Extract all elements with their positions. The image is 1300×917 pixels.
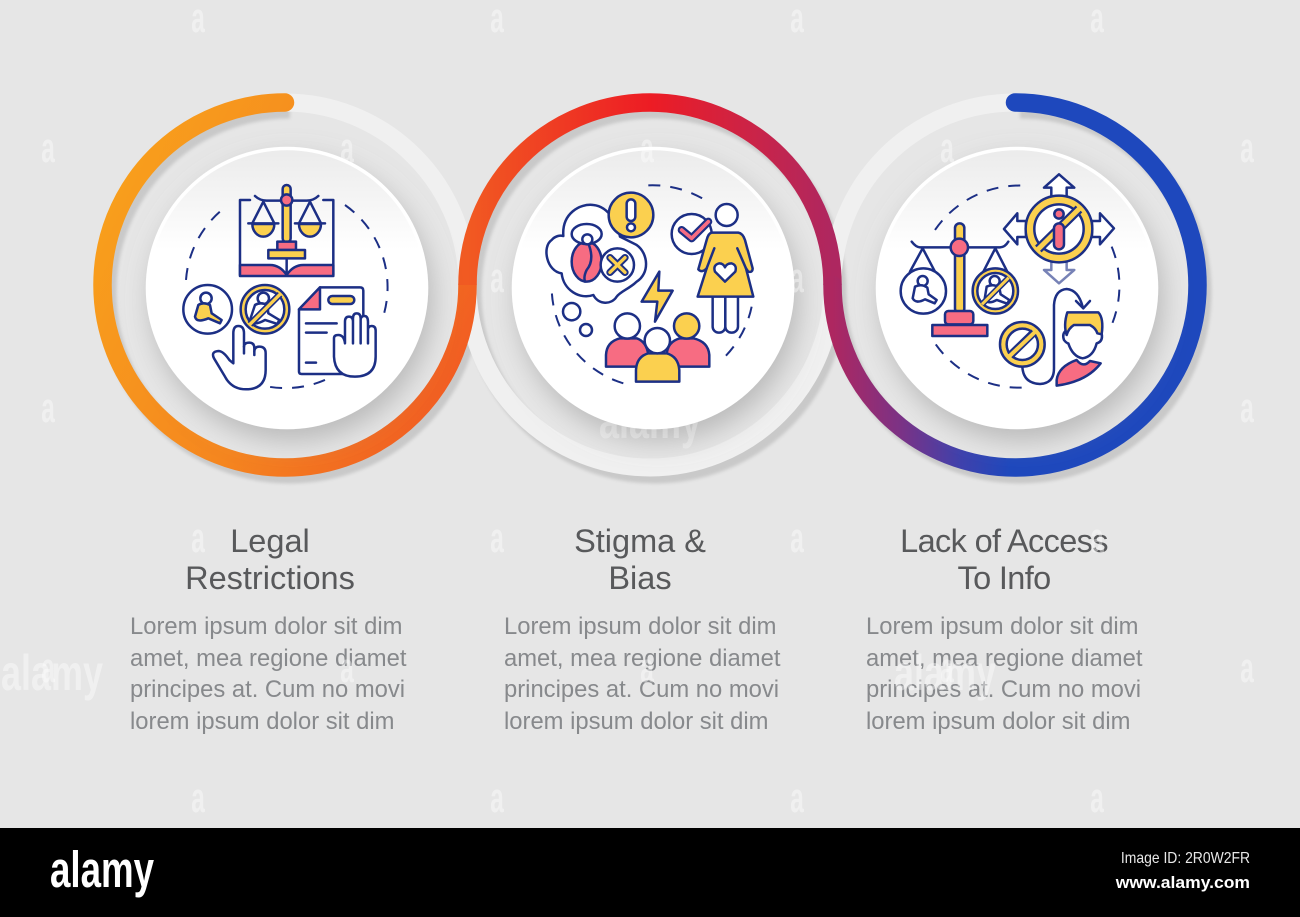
heading: stigma and bias: Stigma & bbox=[574, 523, 706, 559]
heading: stigma and bias: Bias bbox=[608, 560, 672, 596]
heading: legal restrictions: Restrictions bbox=[185, 560, 355, 596]
ring shadows bbox=[108, 110, 1202, 474]
watermark pattern: a bbox=[191, 775, 205, 822]
watermark: alamy left: alamy bbox=[1, 646, 103, 701]
heading: lack of access to info: To Info bbox=[957, 560, 1051, 596]
watermark pattern: a bbox=[790, 775, 804, 822]
watermark pattern: a bbox=[490, 775, 504, 822]
watermark pattern: a bbox=[790, 515, 804, 562]
light ring segments bbox=[285, 102, 1015, 468]
text block: lack of access to info: lorem ipsum dolor sit dim bbox=[866, 708, 1130, 735]
watermark pattern: a bbox=[640, 125, 654, 172]
icon: lack of access to info bbox=[901, 174, 1119, 388]
footer image id: Image ID: 2R0W2FR bbox=[1121, 849, 1250, 867]
watermark pattern: a bbox=[490, 255, 504, 302]
footer url: www.alamy.com bbox=[1115, 872, 1250, 892]
watermark: alamy right: alamy bbox=[894, 646, 996, 701]
icon: legal restrictions bbox=[183, 185, 388, 389]
gradient ribbon bbox=[102, 102, 1198, 468]
watermark: alamy centre: alamy bbox=[599, 394, 701, 449]
watermark pattern: a bbox=[1090, 515, 1104, 562]
text block: lack of access to info: Lorem ipsum dolor sit dim bbox=[866, 613, 1138, 640]
heading: lack of access to info: Lack of Access bbox=[900, 523, 1108, 559]
text block: stigma and bias: lorem ipsum dolor sit dim bbox=[504, 708, 768, 735]
watermark pattern: a bbox=[640, 645, 654, 692]
text block: legal restrictions: Lorem ipsum dolor sit dim bbox=[130, 613, 402, 640]
watermark pattern: a bbox=[940, 645, 954, 692]
text block: lack of access to info: principes at. Cum no movi bbox=[866, 676, 1141, 703]
watermark pattern: a bbox=[490, 515, 504, 562]
watermark pattern: a bbox=[191, 515, 205, 562]
text block: legal restrictions: amet, mea regione diamet bbox=[130, 645, 407, 672]
text block: stigma and bias: Lorem ipsum dolor sit dim bbox=[504, 613, 776, 640]
footer bar bbox=[0, 828, 1300, 917]
watermark pattern: a bbox=[41, 645, 55, 692]
watermark pattern: a bbox=[41, 385, 55, 432]
text block: stigma and bias: principes at. Cum no movi bbox=[504, 676, 779, 703]
text block: legal restrictions: principes at. Cum no movi bbox=[130, 676, 405, 703]
heading: legal restrictions: Legal bbox=[230, 523, 310, 559]
watermark pattern: a bbox=[340, 645, 354, 692]
icon: stigma and bias bbox=[546, 185, 753, 383]
ribbon: purple to blue arc bbox=[832, 102, 1198, 468]
text block: stigma and bias: amet, mea regione diamet bbox=[504, 645, 781, 672]
watermark pattern: a bbox=[940, 125, 954, 172]
watermark pattern: a bbox=[1240, 385, 1254, 432]
watermark pattern: a bbox=[1090, 775, 1104, 822]
text block: legal restrictions: lorem ipsum dolor sit dim bbox=[130, 708, 394, 735]
text block: lack of access to info: amet, mea regione diamet bbox=[866, 645, 1143, 672]
watermark pattern: a bbox=[1240, 645, 1254, 692]
watermark pattern: a bbox=[41, 125, 55, 172]
disc: middle bbox=[514, 148, 792, 428]
ribbon: red arc bbox=[468, 102, 832, 285]
ribbon: orange arc bbox=[102, 102, 468, 468]
watermark pattern: a bbox=[340, 125, 354, 172]
disc: left bbox=[148, 148, 426, 428]
footer logo: alamy bbox=[50, 842, 154, 898]
disc: right bbox=[878, 148, 1156, 428]
watermark pattern: a bbox=[1240, 125, 1254, 172]
watermark pattern: a bbox=[790, 255, 804, 302]
